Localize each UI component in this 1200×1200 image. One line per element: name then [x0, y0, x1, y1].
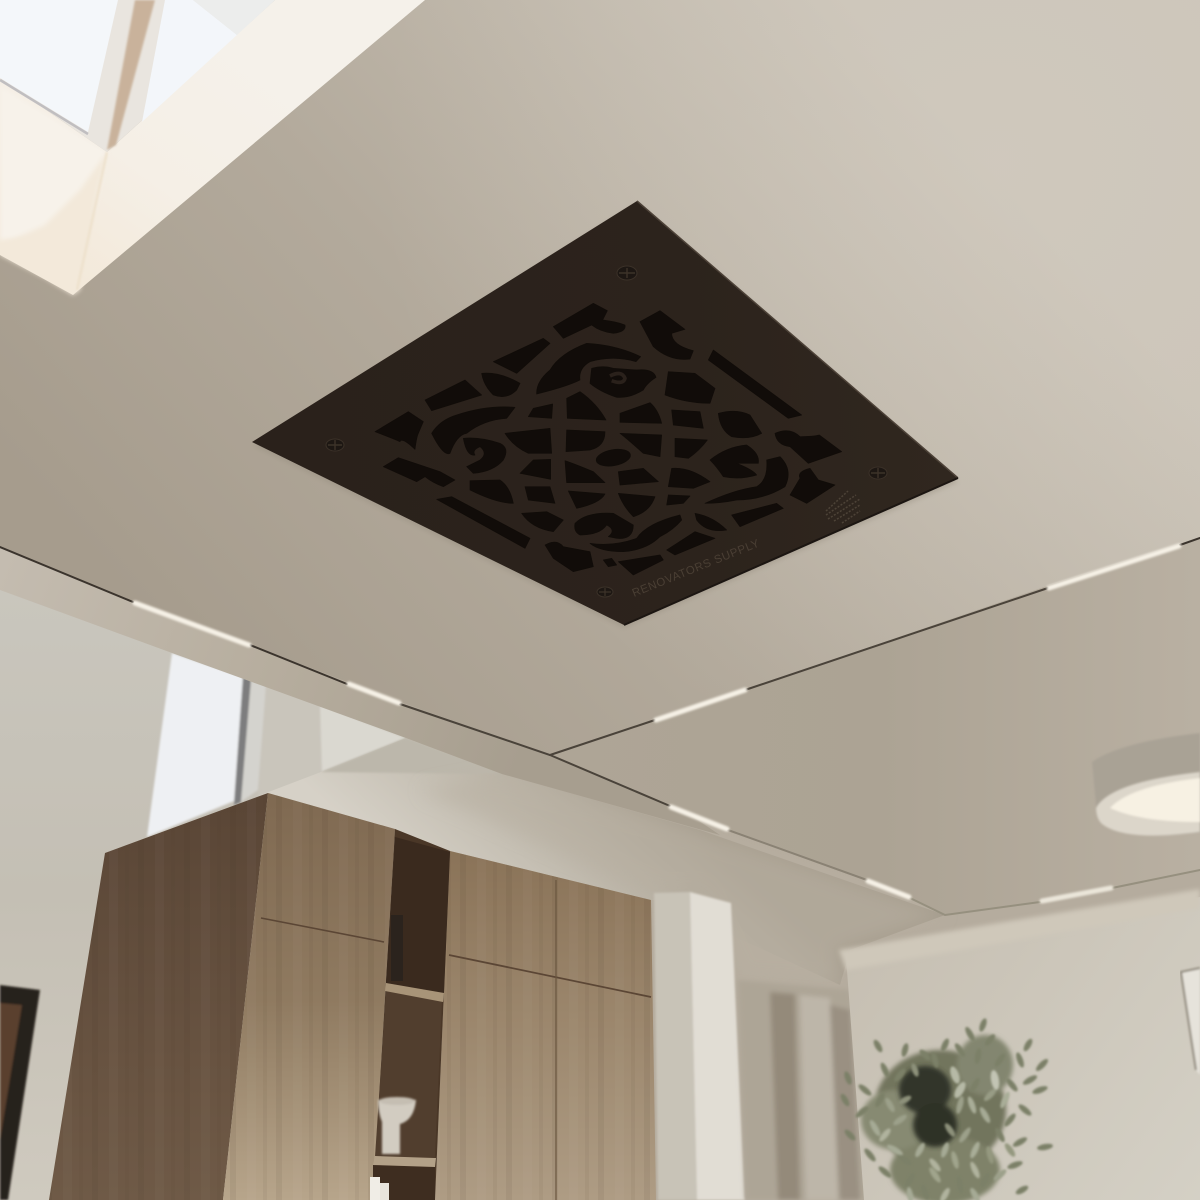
shelf boards [385, 983, 444, 1002]
dark door frame [0, 985, 40, 1200]
window glass panes [0, 0, 118, 132]
window base [0, 0, 275, 152]
round ceiling lamp [1092, 733, 1200, 836]
screw: bottom [597, 587, 613, 597]
object on shelf [391, 915, 403, 981]
upper ceiling panel [0, 0, 1200, 755]
door seams [261, 918, 384, 942]
potted olive plant [839, 1017, 1053, 1200]
skylight reveal [0, 0, 425, 295]
ceramic vase [378, 1097, 416, 1154]
lower ceiling soffit [258, 738, 945, 985]
wall picture frame [1181, 968, 1200, 1075]
wood cabinet [49, 793, 656, 1200]
cove light strip [839, 889, 1200, 970]
recessed hallway [738, 980, 868, 1200]
engraved brand text: RENOVATORS SUPPLY [631, 538, 762, 600]
vent grille plate [252, 201, 958, 625]
skylight [0, 0, 425, 295]
cabinet side [49, 793, 268, 1200]
plant foliage [839, 1017, 1053, 1200]
candles [370, 1177, 389, 1200]
screw: top [617, 266, 637, 280]
window mullion [107, 0, 155, 150]
screw: right [869, 467, 887, 479]
lower right ceiling panel [550, 538, 1200, 915]
plate edge highlight [637, 201, 958, 478]
cabinet left front [223, 793, 395, 1200]
plant dark core [899, 1066, 957, 1147]
pillar [654, 892, 745, 1200]
plant mass [861, 1035, 1013, 1200]
linear LED lights [135, 546, 1179, 901]
screw: left [326, 439, 344, 451]
cabinet right front [435, 851, 656, 1200]
open shelf niche [373, 829, 450, 1200]
ornamental cutouts [375, 303, 842, 575]
stamped label patch [826, 491, 860, 523]
right wall [839, 889, 1200, 1200]
left concrete wall [0, 560, 420, 1200]
grille shadow [254, 204, 958, 628]
tall window [147, 653, 408, 837]
ceiling joint lines [0, 538, 1200, 915]
ceiling edge band [0, 547, 720, 835]
